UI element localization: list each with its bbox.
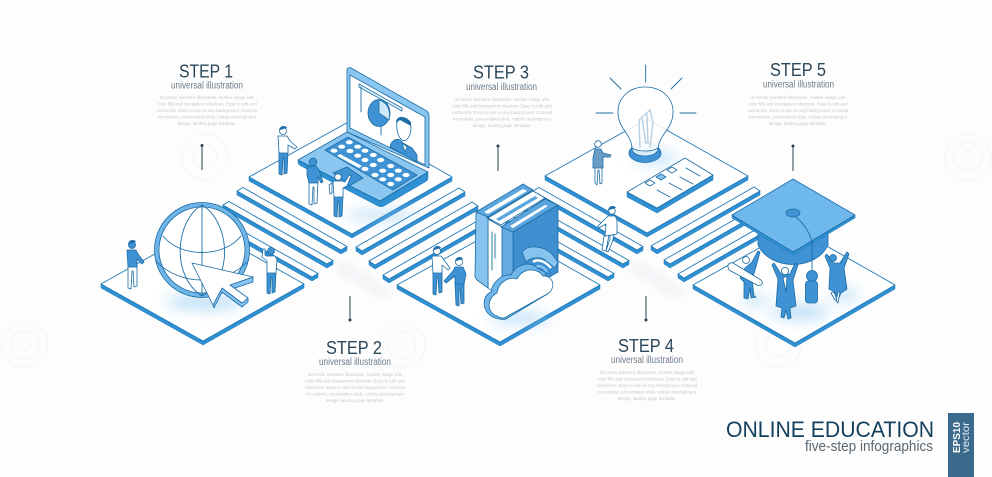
- badge: EPS10 vector: vector: [961, 421, 972, 453]
- step 1 body: color fills and transparent shadows. Easy to edit and: [157, 102, 257, 106]
- subtitle: five-step infographics: [805, 439, 933, 455]
- step 3 body: for website, presentation slide, mobile development: [453, 116, 552, 122]
- badge: EPS10 vector: [948, 413, 974, 477]
- laptop base: [298, 132, 428, 207]
- person: white shirt handshake: [432, 246, 450, 295]
- step 4 body: 3d vector isometric illustration. Outline image with: [600, 370, 695, 375]
- cap button and tassel: [786, 209, 818, 303]
- step 1 body: for website, presentation slide, mobile development: [158, 114, 257, 120]
- left book spine: [475, 212, 488, 288]
- connector: step 4: [644, 296, 648, 322]
- step 3 body: color fills and transparent shadows. Easy to edit and: [452, 104, 552, 108]
- person: woman at bulb: [593, 141, 611, 185]
- step 3 body: 3d vector isometric illustration. Outline image with: [455, 97, 550, 102]
- person: graduate with diploma: [728, 251, 762, 299]
- step 1 body: 3d vector isometric illustration. Outline image with: [160, 95, 255, 100]
- icon: globe: [154, 202, 250, 298]
- icon: graduation cap: [732, 179, 855, 303]
- strips: step 4 to step 5: [651, 187, 787, 282]
- person: graduate raising arms: [772, 263, 798, 319]
- cap board: [732, 179, 855, 255]
- step 4 heading: STEP 4: [618, 336, 674, 356]
- strips: step 2 to step 3: [356, 188, 492, 283]
- step 5 body: for website, presentation slide, mobile development: [749, 114, 848, 120]
- icon: smartphone checklist: [627, 158, 713, 213]
- step 4 body: design, landing page template.: [618, 396, 676, 401]
- step 5 body: design, landing page template.: [769, 121, 827, 126]
- step 4 body: customize. Easy to use on any background. Concept: [597, 383, 698, 388]
- step 2 body: color fills and transparent shadows. Easy to edit and: [305, 378, 405, 384]
- title: ONLINE EDUCATION: [726, 417, 934, 442]
- step 2 subtitle: universal illustration: [319, 357, 391, 368]
- strips: step 3 to step 4: [505, 188, 643, 281]
- platform: step 2: [249, 120, 452, 238]
- middle book spine: [488, 219, 502, 292]
- icon: cloud: [484, 264, 553, 319]
- step 1 body: design, landing page template.: [178, 121, 236, 126]
- platform: step 3: [397, 228, 600, 346]
- person: holding phone near keyboard: [329, 174, 351, 217]
- person: graduate woman raising arms: [825, 252, 849, 303]
- step 2 heading: STEP 2: [326, 338, 382, 358]
- person: waving man at globe: [262, 248, 277, 294]
- strips: step 1 to step 2: [209, 188, 347, 281]
- platform: step 1: [101, 227, 304, 345]
- step 3 subtitle: universal illustration: [466, 82, 537, 93]
- step 4 body: color fills and transparent shadows. Easy to edit and: [597, 376, 697, 382]
- step 2 body: 3d vector isometric illustration. Outline image with: [308, 372, 403, 377]
- laptop screen: [347, 68, 429, 168]
- step 5 body: 3d vector isometric illustration. Outline image with: [751, 95, 846, 100]
- person: white shirt at laptop edge: [278, 126, 297, 175]
- icon: stack of books: [475, 184, 558, 298]
- right book cover: [513, 205, 558, 298]
- person: blue shirt handshake: [444, 257, 466, 306]
- step 4 body: for website, presentation slide, mobile development: [598, 390, 697, 394]
- person: blue shirt with globe: [127, 240, 144, 289]
- laptop trackpad: [333, 167, 363, 186]
- step 1 body: customize. Easy to use on any background. Concept: [157, 108, 258, 113]
- book tops: [476, 184, 558, 232]
- step 5 heading: STEP 5: [770, 60, 826, 80]
- step 5 text: [748, 60, 849, 126]
- connector: step 1: [200, 144, 204, 170]
- step 5 subtitle: universal illustration: [763, 80, 834, 90]
- step 4 text: [597, 336, 698, 401]
- person: blue shirt at keyboard: [307, 158, 323, 205]
- step 5 body: color fills and transparent shadows. Easy to edit and: [748, 102, 848, 106]
- platform: step 4: [545, 119, 748, 237]
- step 2 body: design, landing page template.: [326, 398, 384, 403]
- step 1 text: [157, 62, 258, 126]
- cap skull: [758, 228, 828, 264]
- badge: EPS10 vector: EPS10: [951, 422, 963, 453]
- step 3 text: [452, 62, 553, 128]
- diagonal floor shadows: [330, 260, 690, 300]
- platform: step 5: [693, 228, 895, 347]
- step 3 heading: STEP 3: [473, 62, 529, 82]
- step 2 body: customize. Easy to use on any background. Concept: [305, 385, 406, 390]
- step 1 heading: STEP 1: [179, 62, 233, 82]
- step 2 text: [305, 338, 406, 403]
- step 3 body: design, landing page template.: [473, 123, 531, 128]
- step 5 body: customize. Easy to use on any background. Concept: [748, 108, 849, 113]
- step 1 subtitle: universal illustration: [171, 80, 243, 92]
- icon: laptop: [298, 68, 429, 207]
- step 3 body: customize. Easy to use on any background. Concept: [452, 110, 553, 115]
- person: seated man on strip: [598, 206, 617, 252]
- right book spine: [502, 227, 513, 298]
- laptop keyboard: [325, 137, 417, 190]
- object glows: [165, 152, 859, 324]
- step 4 subtitle: universal illustration: [611, 355, 683, 366]
- step 2 body: for website, presentation slide, mobile development: [306, 392, 405, 396]
- connector: step 3: [496, 144, 500, 171]
- icon: wifi symbol: [522, 247, 558, 272]
- connector: step 2: [348, 296, 352, 322]
- connector: step 5: [792, 144, 794, 171]
- icon: light bulb: [596, 65, 696, 162]
- icon: cursor arrow: [192, 263, 253, 308]
